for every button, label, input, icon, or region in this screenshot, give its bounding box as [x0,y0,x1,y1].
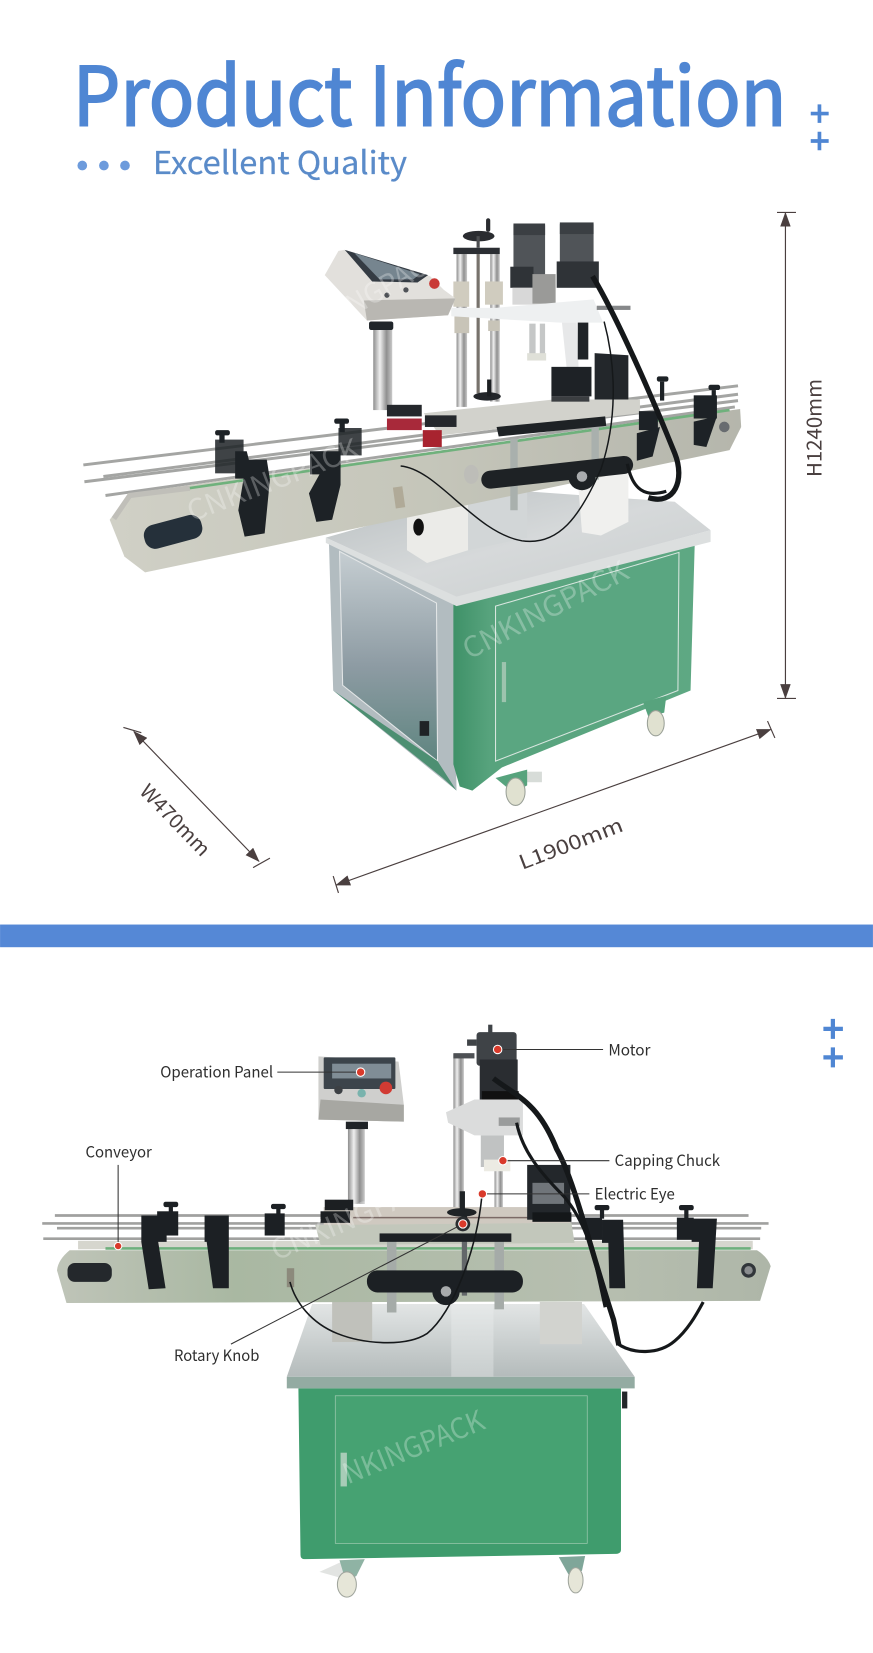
machine: front view [42,1025,771,1597]
callout: electric eye [478,1183,675,1205]
control column [369,322,393,410]
watermarks [180,236,635,668]
title: Product Information [73,32,786,149]
watermarks: CNKINGPACK [455,549,635,668]
rotary bracket and arm [367,1191,523,1312]
conveyor body [110,409,741,572]
cabinet [329,542,695,791]
sensor boxes [551,353,639,408]
callout: capping chuck [499,1149,721,1171]
dimension: width [123,727,270,868]
callout: operation panel: Operation Panel [160,1060,273,1082]
watermarks: CNKINGPACK [264,1160,447,1269]
support pillars [364,469,628,563]
rotary bracket and arm [464,416,624,510]
callout: electric eye: Electric Eye [595,1183,675,1205]
control panel [318,1056,404,1122]
machine: isometric view [83,218,741,805]
callout: operation panel [160,1060,365,1082]
watermarks: NKINGPACK [336,1398,491,1493]
callout: motor: Motor [608,1038,651,1060]
rails back [83,386,738,495]
watermarks: CNKINGPACK [180,427,365,530]
conveyor body [57,1241,771,1303]
casters [319,1556,585,1597]
dimension: height: H1240mm [798,379,827,477]
capper motors [510,222,599,305]
callout: rotary knob [174,1220,467,1366]
table top [287,1304,635,1388]
dimension: length: L1900mm [514,809,627,875]
subtitle with dots: Excellent Quality [153,138,408,184]
watermarks: NGPACK [337,236,450,324]
table top [326,489,711,606]
dimension: length [333,721,775,893]
capper arm [451,299,630,373]
control column [346,1122,368,1204]
control panel [325,250,455,320]
dimension: width: W470mm [134,776,218,862]
lift posts [453,1053,503,1223]
rails [42,1216,769,1239]
icon: plus marks top [811,104,829,150]
platform [315,1200,575,1245]
platform [387,396,640,447]
lift posts [453,218,503,407]
watermarks [264,1160,491,1493]
capper motor and head [446,1025,523,1171]
support legs [332,1302,582,1344]
callout: conveyor: Conveyor [85,1141,152,1163]
cabinet [298,1388,627,1559]
callout: motor [493,1038,651,1060]
guide clips and knobs [215,376,720,537]
icon: plus marks lower [823,1019,843,1067]
guide clips and knobs [141,1202,717,1289]
callout: rotary knob: Rotary Knob [174,1344,259,1366]
sensor box [527,1165,571,1222]
cables [290,1078,703,1352]
cables [401,276,679,541]
casters [496,696,666,805]
callout: capping chuck: Capping Chuck [615,1149,721,1171]
callout: conveyor [85,1141,152,1250]
divider band [0,925,873,947]
